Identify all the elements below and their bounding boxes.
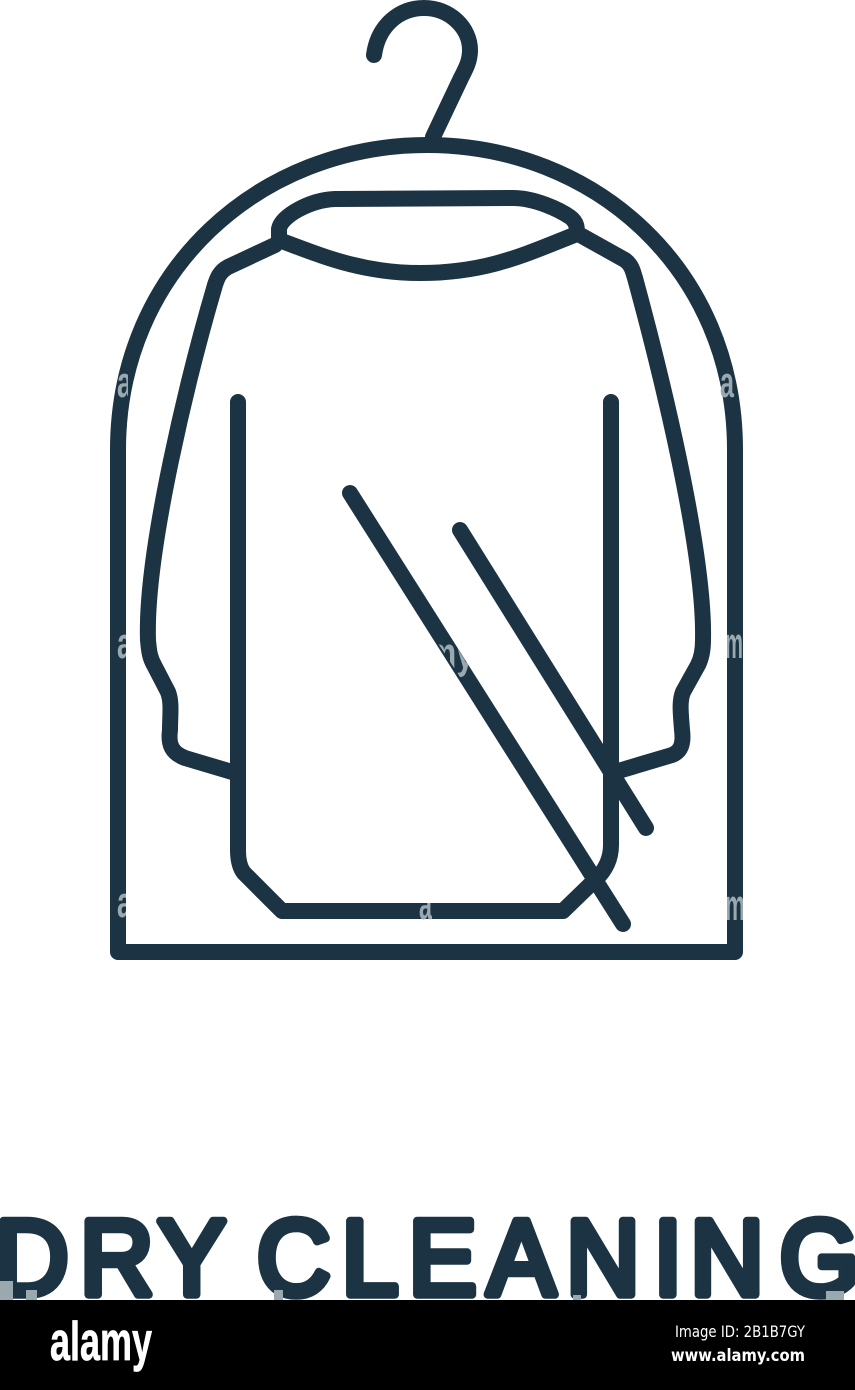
footer bar [0,1300,855,1390]
watermark fragments [117,358,745,930]
watermark fragments: a [117,358,132,407]
icon: short crease line [460,530,646,828]
watermark fragments: a [419,880,432,929]
icon: right sleeve [582,236,703,772]
icon: sweater collar [279,198,577,273]
logo: alamy: alamy [50,1310,152,1372]
watermark fragments: a [720,358,734,407]
watermark fragments: m [725,619,743,668]
title: DRY CLEANING [0,1199,855,1318]
watermark fragments: a [117,878,132,927]
icon: dry cleaning garment in bag [118,8,735,952]
icon: hanger hook [374,8,470,137]
icon: long crease line [350,493,623,924]
watermark fragments: m [725,881,745,930]
website url: www.alamy.com [671,1346,805,1366]
image id: Image ID: 2B1B7GY [675,1322,805,1341]
icon: left sleeve [148,245,275,772]
icon: garment bag outline [118,145,735,952]
watermark fragments: a [117,619,132,668]
watermark fragments: my [428,629,474,678]
title watermark fragments [0,1281,844,1300]
icon: sweater body [238,402,611,911]
